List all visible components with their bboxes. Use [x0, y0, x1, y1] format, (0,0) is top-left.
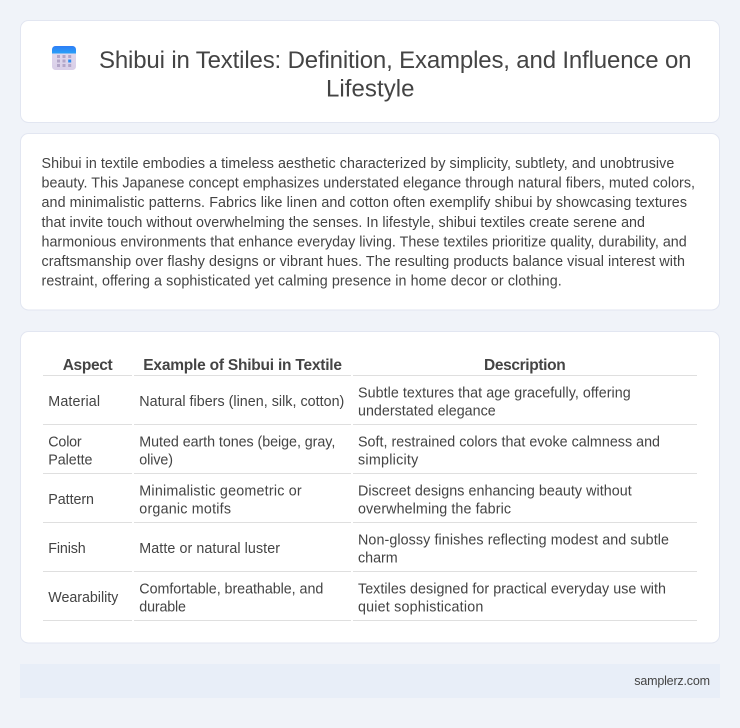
table row: pattern: Pattern — [48, 492, 94, 508]
intro paragraph: that invite touch without overwhelming the senses. In lifestyle, shibui textiles create serene and — [42, 215, 645, 231]
intro paragraph: harmonious environments that enhance everyday living. These textiles prioritize quality, durability, and — [42, 234, 687, 250]
table row: material: Material — [48, 394, 100, 410]
table row: color palette: Palette — [48, 452, 93, 468]
footer: samplerz.com — [634, 674, 710, 688]
table row: wearability — [43, 582, 697, 621]
table row: wearability: Wearability — [48, 590, 119, 606]
table row: pattern: Minimalistic geometric or — [139, 484, 302, 500]
icon: calendar — [52, 46, 76, 70]
table row: wearability: Textiles designed for practical everyday use with — [358, 582, 666, 598]
table row: finish: charm — [358, 550, 398, 566]
table header: Description — [484, 357, 566, 374]
intro paragraph: beauty. This Japanese concept emphasizes understated elegance through natural fibers, muted colors, — [42, 176, 695, 192]
table row: color palette — [43, 434, 697, 474]
footer — [20, 664, 720, 698]
table row: finish: Non-glossy finishes reflecting modest and subtle — [358, 532, 669, 548]
table row: finish: Finish — [48, 541, 86, 557]
table row: wearability: durable — [139, 600, 186, 616]
table row: wearability: Comfortable, breathable, and — [139, 582, 323, 598]
intro paragraph: restraint, offering a sophisticated yet calming presence in home decor or clothing. — [42, 274, 562, 290]
table row: color palette: Muted earth tones (beige, gray, — [139, 434, 335, 450]
intro paragraph: Shibui in textile embodies a timeless aesthetic characterized by simplicity, subtlety, and unobtrusive — [42, 156, 674, 172]
panel: title card — [20, 20, 720, 122]
table header — [43, 357, 697, 376]
title: Shibui in Textiles: Definition, Examples, and Influence on — [99, 47, 692, 74]
table row: material: Subtle textures that age gracefully, offering — [358, 386, 631, 402]
table row: material — [43, 386, 697, 425]
table row: material: Natural fibers (linen, silk, cotton) — [139, 394, 344, 410]
table row: finish — [43, 532, 697, 572]
panel: introduction — [20, 134, 720, 310]
table row: finish: Matte or natural luster — [139, 541, 280, 557]
intro paragraph: craftsmanship over flashy designs or vibrant hues. The resulting products balance visual interest with — [42, 254, 685, 270]
intro paragraph: and minimalistic patterns. Fabrics like linen and cotton often exemplify shibui by showcasing textures — [42, 195, 687, 211]
panel: table card — [20, 332, 720, 643]
table header: Aspect — [63, 357, 113, 374]
table row: pattern: overwhelming the fabric — [358, 502, 511, 518]
table row: color palette: Color — [48, 434, 82, 450]
table row: material: understated elegance — [358, 404, 496, 420]
table row: color palette: olive) — [139, 452, 173, 468]
table row: pattern: organic motifs — [139, 502, 231, 518]
table header: Example of Shibui in Textile — [143, 357, 342, 374]
table row: pattern — [43, 484, 697, 523]
intro paragraph — [42, 156, 695, 290]
table row: color palette: Soft, restrained colors that evoke calmness and — [358, 434, 660, 450]
title — [99, 47, 692, 102]
table row: pattern: Discreet designs enhancing beauty without — [358, 484, 632, 500]
table row: wearability: quiet sophistication — [358, 600, 483, 616]
title: Lifestyle — [326, 76, 414, 102]
table row: color palette: simplicity — [358, 452, 419, 468]
